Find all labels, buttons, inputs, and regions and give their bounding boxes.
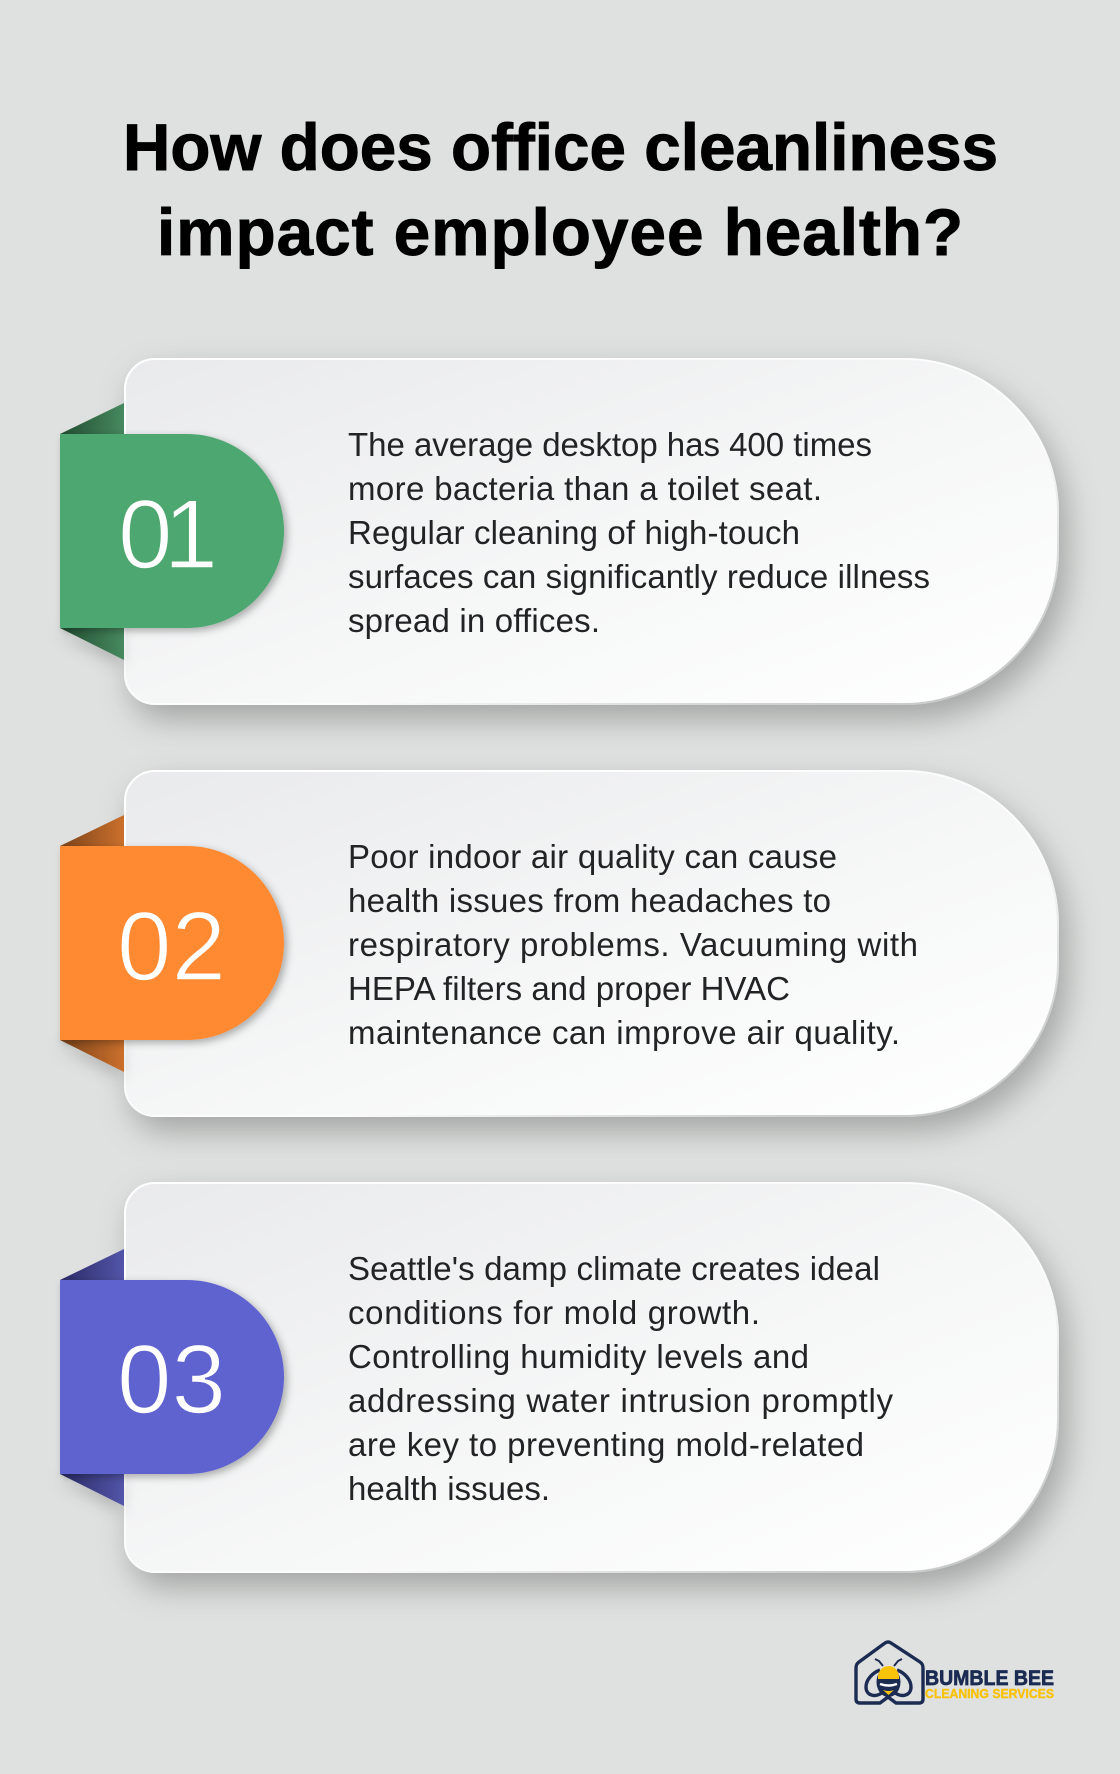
text block 1: Regular cleaning of high-touch	[348, 514, 800, 551]
card 3 background	[125, 1183, 1058, 1572]
title: How does office cleanliness	[123, 111, 998, 184]
ribbon fold bottom 3	[60, 1474, 124, 1506]
card 2 background	[125, 771, 1058, 1116]
text block 2: respiratory problems. Vacuuming with	[348, 926, 918, 963]
text block 2: Poor indoor air quality can cause	[348, 838, 837, 875]
brand name: BUMBLE BEE	[925, 1667, 1054, 1690]
icon: house with bee	[856, 1642, 923, 1703]
number tab 1	[60, 434, 284, 628]
number 03: 03	[117, 1324, 226, 1434]
text block 2: HEPA filters and proper HVAC	[348, 970, 790, 1007]
ribbon fold top 3	[60, 1249, 124, 1280]
title	[123, 111, 998, 269]
number tab 2	[60, 846, 284, 1040]
text block 2	[348, 838, 918, 1051]
text block 3: health issues.	[348, 1470, 550, 1507]
text block 1: surfaces can significantly reduce illness	[348, 558, 930, 595]
ribbon fold top 1	[60, 403, 124, 434]
brand tagline: CLEANING SERVICES	[925, 1687, 1054, 1701]
text block 1: The average desktop has 400 times	[348, 426, 872, 463]
text block 1: spread in offices.	[348, 602, 600, 639]
card 1 background	[125, 359, 1058, 704]
number 01: 01	[118, 479, 218, 589]
ribbon fold top 2	[60, 815, 124, 846]
ribbon fold bottom 2	[60, 1040, 124, 1072]
text block 3	[348, 1250, 894, 1507]
text block 3: are key to preventing mold-related	[348, 1426, 864, 1463]
text block 3: Seattle's damp climate creates ideal	[348, 1250, 880, 1287]
logo: Bumble Bee Cleaning Services	[856, 1642, 1054, 1703]
panel: step 2 air quality	[60, 771, 1058, 1116]
panel: step 1 bacteria	[60, 359, 1058, 704]
text block 2: maintenance can improve air quality.	[348, 1014, 900, 1051]
text block 3: conditions for mold growth.	[348, 1294, 760, 1331]
number tab 3	[60, 1280, 284, 1474]
text block 3: Controlling humidity levels and	[348, 1338, 809, 1375]
text block 2: health issues from headaches to	[348, 882, 831, 919]
text block 1: more bacteria than a toilet seat.	[348, 470, 822, 507]
ribbon fold bottom 1	[60, 628, 124, 660]
text block 1	[348, 426, 930, 639]
title: impact employee health?	[157, 196, 963, 269]
number 02: 02	[117, 891, 226, 1001]
panel: step 3 mold	[60, 1183, 1058, 1572]
text block 3: addressing water intrusion promptly	[348, 1382, 894, 1419]
